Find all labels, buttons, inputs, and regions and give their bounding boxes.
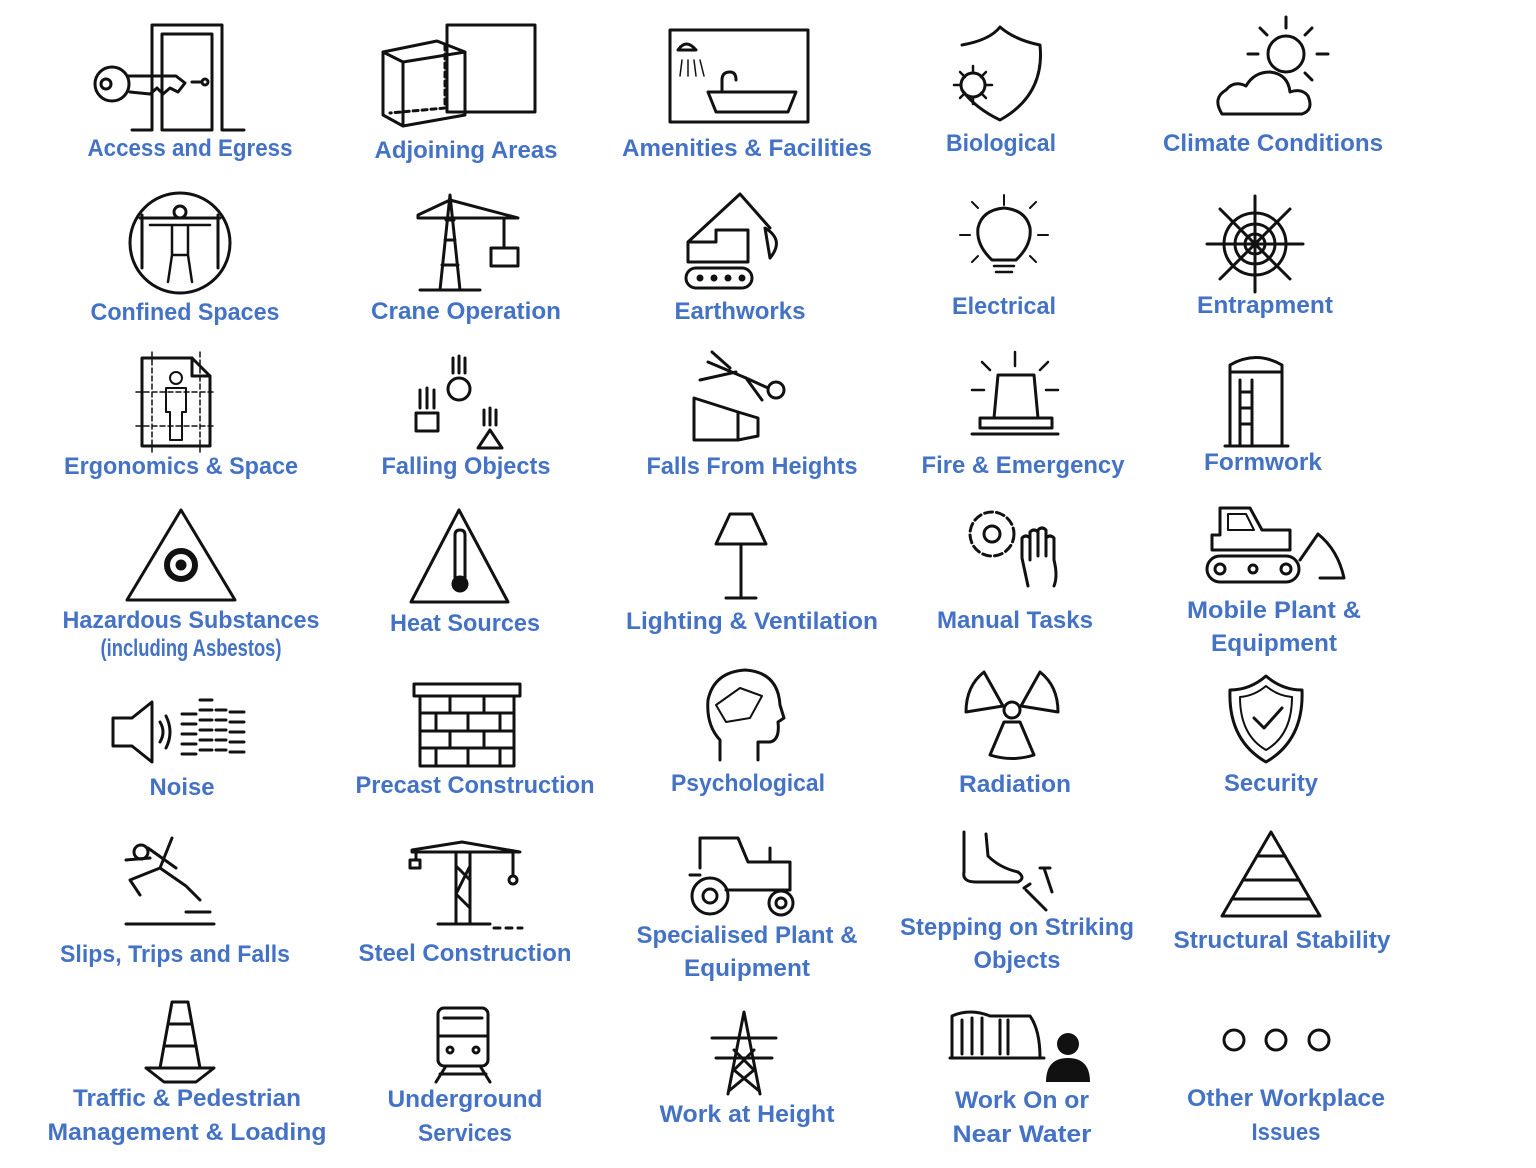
cell: Ergonomics	[64, 352, 298, 480]
cell: Other: Issues	[1252, 1119, 1320, 1146]
icon: beacon	[972, 352, 1058, 434]
cell: Specialised Plant: Specialised Plant &	[636, 922, 858, 949]
cell: Work at Height: Work at Height	[660, 1101, 835, 1128]
cell: Falls From Heights: Falls From Heights	[646, 453, 858, 480]
cell: Formwork: Formwork	[1204, 449, 1323, 476]
cell: Underground: Underground	[388, 1086, 542, 1113]
icon: foot nails	[964, 832, 1052, 910]
cell: Hazardous Substances	[62, 510, 320, 662]
icon: boxes	[383, 25, 535, 126]
icon: waterfall person	[950, 1012, 1044, 1058]
cell: Adjoining Areas: Adjoining Areas	[374, 137, 558, 164]
cell: Psychological: Psychological	[671, 770, 825, 797]
cell: Falling Objects: Falling Objects	[382, 453, 550, 480]
cell: Amenities: Amenities & Facilities	[622, 135, 872, 162]
cell: Traffic	[48, 1002, 326, 1146]
cell: Climate	[1163, 17, 1383, 157]
cell: Specialised Plant	[636, 838, 858, 982]
cell: Adjoining Areas	[374, 25, 558, 164]
cell: Manual Tasks	[937, 512, 1093, 634]
cell: Specialised Plant: Equipment	[684, 955, 810, 982]
cell: Heat Sources: Heat Sources	[390, 610, 540, 637]
cell: Traffic: Management & Loading	[48, 1119, 326, 1146]
cell: Security: Security	[1224, 770, 1319, 797]
icon: person in circle	[130, 193, 230, 293]
icon: web	[1207, 196, 1303, 292]
icon: brick wall	[414, 684, 520, 766]
cell: Electrical: Electrical	[952, 293, 1056, 320]
icon: slipping person	[126, 838, 214, 924]
icon: person	[1046, 1033, 1090, 1082]
icon: tractor	[690, 838, 793, 915]
cell: Electrical	[952, 195, 1056, 320]
cell: Slips: Slips, Trips and Falls	[60, 941, 290, 968]
cell: Underground	[388, 1008, 542, 1147]
cell: Hazardous Substances: Hazardous Substances	[62, 607, 320, 634]
icon: formwork tower	[1225, 358, 1288, 446]
cell: Radiation: Radiation	[959, 771, 1071, 798]
cell: Water: Work On or	[955, 1087, 1089, 1114]
cell: Hazardous Substances: (including Asbestos)	[100, 635, 282, 662]
cell: Mobile Plant: Mobile Plant &	[1187, 597, 1361, 624]
cell: Entrapment: Entrapment	[1197, 292, 1333, 319]
cell: Slips	[60, 838, 290, 968]
cell: Access and Egress: Access and Egress	[88, 135, 292, 162]
cell: Work at Height	[660, 1012, 835, 1128]
cell: Crane	[371, 195, 561, 325]
cell: Falling Objects	[382, 356, 550, 480]
icon: biohazard triangle	[127, 510, 235, 600]
icon: radiation	[966, 672, 1058, 758]
icon: pyramid	[1222, 832, 1320, 916]
cell: Water	[950, 1012, 1092, 1148]
icon: crane	[418, 195, 518, 290]
cell: Water: Near Water	[952, 1121, 1092, 1148]
cell: Radiation	[959, 672, 1071, 798]
icon: shield virus	[954, 27, 1040, 120]
cell: Psychological	[671, 670, 825, 797]
cell: Underground: Services	[418, 1120, 512, 1147]
cell: Crane: Crane Operation	[371, 298, 561, 325]
cell: Falls From Heights	[646, 352, 858, 480]
icon: document person	[136, 352, 216, 452]
cell: Steel	[358, 842, 572, 967]
cell: Traffic: Traffic & Pedestrian	[73, 1085, 301, 1112]
cell: Earthworks: Earthworks	[674, 298, 806, 325]
icon: falling objects	[416, 356, 502, 448]
icon: shield check	[1230, 676, 1302, 762]
cell: Manual Tasks: Manual Tasks	[937, 607, 1093, 634]
icon: speaker	[113, 700, 244, 762]
icon: gear hand	[970, 512, 1056, 586]
icon: bulb	[960, 195, 1048, 272]
icon: excavator	[686, 194, 776, 288]
cell: Fire & Emergency	[922, 352, 1125, 479]
icon: door with key	[95, 25, 244, 130]
cell: Security	[1224, 676, 1319, 797]
cell: Noise	[113, 700, 244, 801]
cell: Stepping: Stepping on Striking	[900, 914, 1134, 941]
cell: Other: Other Workplace	[1187, 1085, 1385, 1112]
icon: train	[436, 1008, 490, 1082]
cell: Structural Stability	[1174, 832, 1391, 954]
cell: Formwork	[1204, 358, 1323, 476]
icon: tower crane	[410, 842, 522, 928]
cell: Biological: Biological	[946, 130, 1056, 157]
cell: Lighting: Lighting & Ventilation	[626, 608, 878, 635]
cell: Climate: Climate Conditions	[1163, 130, 1383, 157]
cell: Steel: Steel Construction	[358, 940, 572, 967]
icon: bathtub	[670, 30, 808, 122]
cell: Stepping: Objects	[974, 947, 1060, 974]
cell: Mobile Plant	[1187, 508, 1361, 657]
cell: Fire & Emergency: Fire & Emergency	[922, 452, 1125, 479]
cell: Other	[1187, 1030, 1385, 1146]
icon: lamp	[716, 514, 766, 598]
cell: Entrapment	[1197, 196, 1333, 319]
cell: Amenities	[622, 30, 872, 162]
icon: head puzzle	[708, 670, 784, 760]
cell: Precast	[356, 684, 594, 799]
cell: Mobile Plant: Equipment	[1211, 630, 1337, 657]
icon: three circles	[1224, 1030, 1329, 1050]
icon: pylon	[712, 1012, 776, 1094]
icon: cone	[146, 1002, 214, 1082]
icon: thermometer triangle	[411, 510, 508, 602]
cell: Confined Spaces: Confined Spaces	[90, 299, 280, 326]
cell: Access and Egress	[88, 25, 292, 162]
icon: falling person	[694, 352, 784, 440]
cell: Noise: Noise	[150, 774, 214, 801]
cell: Heat Sources	[390, 510, 540, 637]
cell: Earthworks	[674, 194, 806, 325]
cell: Precast: Precast Construction	[356, 772, 594, 799]
cell: Confined Spaces	[90, 193, 280, 326]
cell: Biological	[946, 27, 1056, 157]
cell: Lighting	[626, 514, 878, 635]
cell: Ergonomics: Ergonomics & Space	[64, 453, 298, 480]
icon: bulldozer	[1207, 508, 1344, 582]
icon: sun cloud	[1218, 17, 1328, 114]
cell: Stepping	[900, 832, 1134, 974]
cell: Structural Stability: Structural Stability	[1174, 927, 1391, 954]
